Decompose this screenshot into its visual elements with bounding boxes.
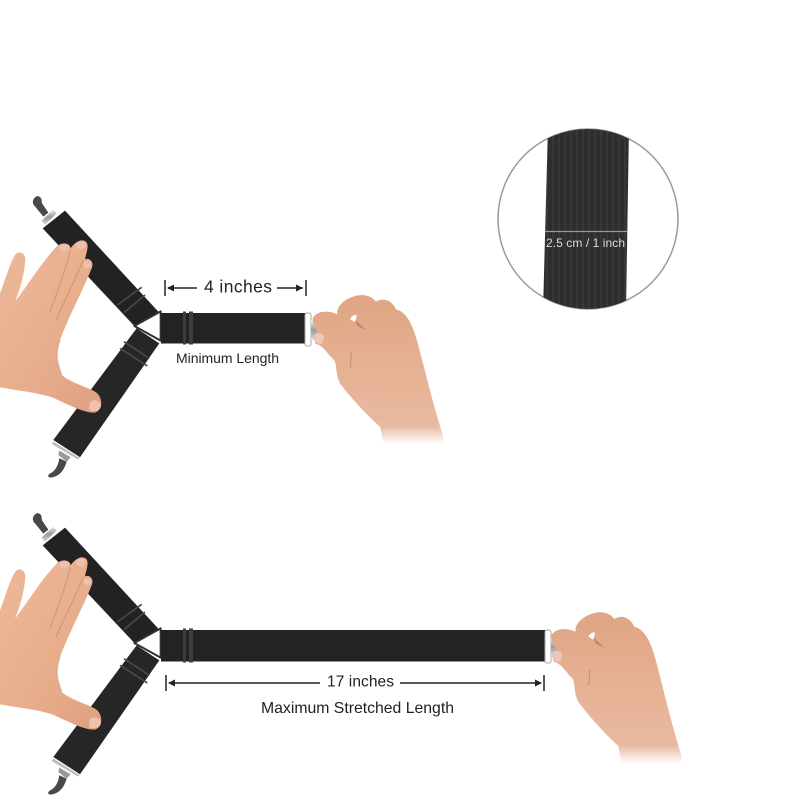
icon: left hand [0, 557, 101, 730]
icon: maximum length horizontal strap [161, 628, 547, 662]
icon: upper clip [33, 513, 57, 542]
icon: lower clip [48, 442, 80, 478]
icon: right hand, minimum length [313, 295, 443, 444]
icon: upper strap [43, 211, 158, 327]
icon: right clip, minimum length [305, 313, 328, 346]
finger creases [50, 568, 83, 637]
icon: right hand, maximum length [551, 612, 682, 763]
icon: triangle ring [134, 311, 161, 341]
panel: magnified strap width circle [498, 125, 678, 312]
label: minimum length: Minimum Length [176, 350, 279, 366]
measure line [545, 230, 627, 232]
heading: 4 inches: 4 inches [204, 276, 272, 296]
arrow: 17 inches right [400, 675, 544, 691]
icon: lower clip [48, 759, 80, 795]
icon: lower strap [53, 328, 159, 457]
icon: triangle ring [134, 628, 161, 658]
fingernails [59, 241, 101, 411]
icon: upper clip [33, 196, 57, 225]
fingernails [59, 558, 101, 728]
icon: right clip, maximum length [545, 630, 568, 663]
arrow: 4 inches right [277, 280, 306, 296]
heading: 17 inches: 17 inches [327, 674, 394, 690]
panel: minimum length strap assembly held by left hand [0, 196, 161, 478]
icon: magnified black elastic strap [543, 125, 629, 312]
icon: lower strap [53, 645, 159, 774]
icon: upper strap [43, 528, 158, 644]
icon: minimum length horizontal strap [161, 312, 307, 344]
icon: strap adjuster buckles [117, 604, 149, 683]
arrow: 17 inches left [166, 675, 320, 691]
arrow: 4 inches left [165, 280, 197, 296]
width label: 2.5 cm / 1 inch [546, 236, 625, 250]
finger creases [50, 251, 83, 320]
icon: lens outline [498, 129, 678, 309]
panel: maximum length strap assembly held by left hand [0, 513, 161, 795]
icon: strap adjuster buckles [117, 287, 149, 366]
label: maximum stretched length: Maximum Stretched Length [261, 700, 454, 717]
icon: left hand [0, 240, 101, 413]
